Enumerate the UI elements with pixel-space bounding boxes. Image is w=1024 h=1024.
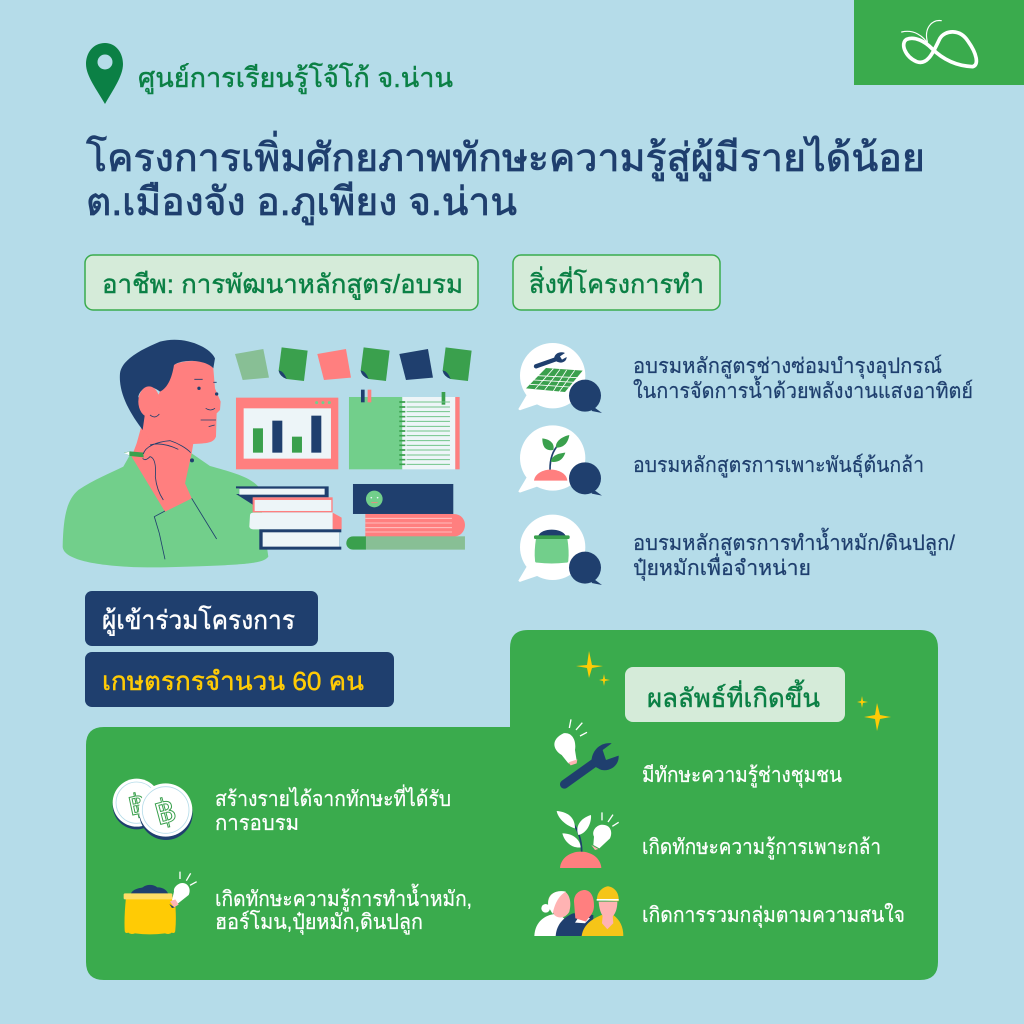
participants count [85,652,394,707]
icon: seedling and bulb [557,811,619,868]
text: seedling skill: เกิดทักษะความรู้การเพาะกล้า [642,836,881,860]
text: solar maintenance course [633,354,973,403]
icon: coins: ฿ [150,792,181,833]
icon: bulb and wrench [554,719,619,784]
text: compost skill [215,884,472,935]
icon: coins [113,779,193,840]
text: compost course: อบรมหลักสูตรการทำน้ำหมัก/ดินปลูก/ [633,528,955,556]
text: compost skill: เกิดทักษะความรู้การทำน้ำหมัก, [215,884,472,912]
text: compost skill: ฮอร์โมน,ปุ๋ยหมัก,ดินปลูก [215,910,423,935]
results heading: ผลลัพธ์ที่เกิดขึ้น [647,679,820,713]
icon: group of people [534,886,623,936]
illustration: man thinking with books and charts [63,340,472,567]
occupation label: อาชีพ: การพัฒนาหลักสูตร/อบรม [102,269,463,300]
title [86,131,925,225]
icon: location pin [86,43,123,104]
text: community technician: มีทักษะความรู้ช่างชุมชน [642,764,842,788]
title: โครงการเพิ่มศักยภาพทักษะความรู้สู่ผู้มีรายได้น้อย [86,131,925,181]
text: income: การอบรม [215,812,299,835]
icon: solar panel and wrench bubble [518,343,602,413]
bar chart panel [236,398,338,469]
participants label: ผู้เข้าร่วมโครงการ [102,605,295,636]
sticky notes [235,347,472,381]
activities label: สิ่งที่โครงการทำ [529,266,704,299]
text: income [215,784,451,835]
icon: sparkles [576,651,891,731]
participants label [85,591,318,646]
icon: coins: ฿ [125,787,149,821]
text: seedling course: อบรมหลักสูตรการเพาะพันธุ์ต้นกล้า [633,453,924,478]
text: interest groups: เกิดการรวมกลุ่มตามความสนใจ [642,903,905,928]
title: ต.เมืองจัง อ.ภูเพียง จ.น่าน [86,181,517,225]
notebook [349,390,460,469]
icon: compost bag with bulb [124,872,197,934]
results heading [625,667,845,722]
text: solar maintenance course: ในการจัดการน้ำด้วยพลังงานแสงอาทิตย์ [633,376,973,403]
activities label [513,255,720,310]
location heading: ศูนย์การเรียนรู้โจ้โก้ จ.น่าน [138,62,453,94]
participants count: เกษตรกรจำนวน 60 คน [102,666,364,696]
panel: results [86,630,938,980]
icon: seedling bubble [518,425,602,496]
occupation label [85,255,478,310]
logo: green butterfly badge [854,0,1024,85]
icon: compost bag bubble [518,515,602,585]
text: income: สร้างรายได้จากทักษะที่ได้รับ [215,784,451,811]
man [63,340,268,567]
text: compost course: ปุ๋ยหมักเพื่อจำหน่าย [633,553,811,581]
text: solar maintenance course: อบรมหลักสูตรช่างซ่อมบำรุงอุปกรณ์ [633,354,942,379]
book stack right [346,484,465,550]
book stack left [236,486,342,550]
text: compost course [633,528,955,581]
